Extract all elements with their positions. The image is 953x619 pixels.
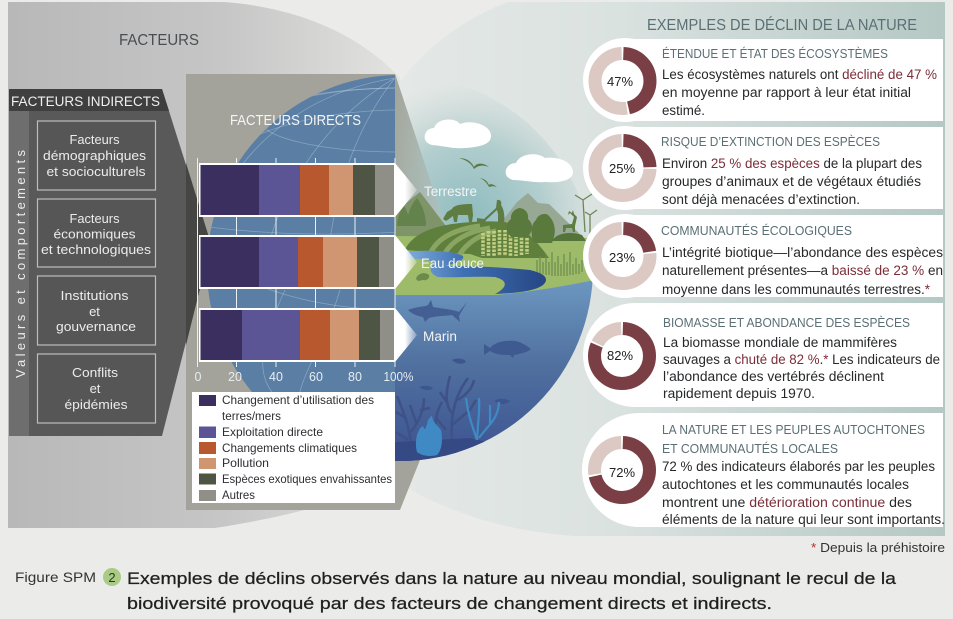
shark [408, 300, 467, 322]
box: economic factors: économiques [54, 226, 136, 242]
box: demographic factors: démographiques [43, 148, 147, 163]
card: indigenous peoples: éléments de la nature qui leur sont importants. [662, 512, 945, 527]
box: economic factors: et technologiques [41, 242, 152, 257]
box: demographic factors [38, 121, 156, 190]
caption text [127, 569, 897, 613]
card: ecosystems: en moyenne par rapport à leur état initial [662, 85, 911, 100]
legend: Espèces exotiques envahissantes [222, 472, 392, 486]
caption text: Exemples de déclins observés dans la nature au niveau mondial, soulignant le recul de la [127, 569, 897, 588]
animals and people [443, 200, 577, 232]
box: conflicts: et [90, 381, 101, 396]
card: indigenous peoples: 72 % des indicateurs élaborés par les peuples [662, 459, 935, 474]
reeds [537, 252, 582, 276]
card: indigenous peoples: LA NATURE ET LES PEUPLES AUTOCHTONES [662, 422, 925, 437]
box: institutions: et [89, 304, 100, 319]
donut: 72%: 72% [609, 465, 635, 480]
corn patch [483, 230, 527, 256]
box: economic factors: Facteurs [70, 211, 120, 226]
deer [563, 210, 577, 232]
beam [395, 74, 444, 260]
card: ecological communities: naturellement présentes—a baissé de 23 % en [662, 263, 943, 278]
hills [395, 192, 586, 240]
legend: terres/mers [222, 409, 281, 423]
dark coral [396, 376, 476, 450]
panel: indirect factors [9, 89, 211, 436]
axis: 40 [269, 370, 283, 384]
box: demographic factors: Facteurs [70, 132, 120, 147]
card: extinction risk: Environ 25 % des espèces de la plupart des [662, 156, 922, 171]
box: demographic factors: et socioculturels [46, 164, 146, 179]
heading: facteurs: FACTEURS [119, 32, 199, 49]
legend: Changement d’utilisation des [222, 393, 374, 407]
axis: 20 [228, 370, 242, 384]
box: institutions: gouvernance [56, 319, 136, 334]
card: indigenous peoples: ET COMMUNAUTÉS LOCALES [662, 441, 838, 456]
card: extinction risk [583, 126, 943, 210]
land [395, 208, 600, 295]
card: biomass: BIOMASSE ET ABONDANCE DES ESPÈCES [663, 315, 910, 330]
farmer [477, 200, 504, 224]
marine life [395, 300, 531, 470]
donut: 23%: 23% [609, 250, 635, 265]
box: conflicts [38, 354, 156, 423]
river [395, 251, 546, 294]
card: extinction risk: RISQUE D’EXTINCTION DES ESPÈCES [661, 134, 880, 149]
donut: 47% [595, 54, 650, 108]
legend: Changements climatiques [222, 441, 357, 455]
arrow: eau douce [395, 235, 417, 289]
box: economic factors [38, 199, 156, 267]
axis: 60 [309, 370, 323, 384]
card: extinction risk: sont déjà menacées d’extinction. [662, 192, 860, 207]
illustration: globe [208, 74, 598, 461]
badge: figure number [103, 568, 121, 586]
trees [507, 208, 555, 243]
clouds [425, 119, 573, 182]
card: ecological communities: moyenne dans les communautés terrestres.* [662, 282, 931, 297]
legend: Pollution [222, 456, 269, 470]
axis: 80 [348, 370, 362, 384]
box: institutions: Institutions [60, 288, 129, 303]
donut: 25% [595, 140, 650, 196]
caption [15, 568, 897, 613]
globe: blue hemisphere with grid [208, 75, 395, 392]
frog [416, 273, 429, 281]
fish [484, 341, 531, 358]
figure label: Figure SPM [15, 570, 96, 585]
heading: exemples de declin de la nature: EXEMPLES DE DÉCLIN DE LA NATURE [647, 17, 917, 34]
arrow: marin [395, 308, 417, 362]
card: ecosystems: estimé. [662, 103, 705, 118]
card: ecosystems [583, 38, 943, 122]
card: ecological communities: COMMUNAUTÉS ÉCOLOGIQUES [661, 223, 852, 238]
axis: 100% [384, 370, 414, 384]
card: biomass [583, 303, 943, 407]
axis [195, 158, 414, 384]
label: marin: Marin [423, 329, 457, 344]
arrow: terrestre [395, 163, 417, 217]
strip: values and behaviours: Valeurs et comportements [13, 150, 28, 378]
bar: marin [199, 308, 395, 362]
strip: values and behaviours [9, 111, 29, 436]
sky glow [408, 96, 586, 236]
heading: facteurs directs: FACTEURS DIRECTS [230, 113, 361, 129]
card: ecosystems: Les écosystèmes naturels ont décliné de 47 % [662, 67, 937, 82]
card: ecosystems: ÉTENDUE ET ÉTAT DES ÉCOSYSTÈMES [662, 46, 888, 61]
card: extinction risk: groupes d’animaux et de végétaux étudiés [662, 174, 921, 189]
panel: nature decline background [395, 2, 945, 536]
card: ecological communities: L’intégrité biotique—l’abondance des espèces [662, 245, 943, 260]
badge: figure number: 2 [108, 570, 116, 585]
label: eau douce: Eau douce [421, 256, 484, 271]
donut: 25%: 25% [609, 161, 635, 176]
card: ecological communities [583, 214, 943, 298]
donut: 72% [594, 442, 650, 498]
ocean [395, 280, 600, 470]
panel: direct factors frame [186, 74, 444, 510]
donut: 82%: 82% [607, 348, 633, 363]
donut: 47%: 47% [607, 74, 633, 89]
footnote: * Depuis la préhistoire [811, 540, 945, 555]
donut: 23% [595, 228, 650, 284]
box: institutions [38, 276, 156, 345]
card: biomass: rapidement depuis 1970. [663, 386, 815, 401]
cow [443, 204, 473, 222]
heading: facteurs indirects: FACTEURS INDIRECTS [11, 94, 160, 109]
curved field [405, 221, 549, 258]
axis: 0 [195, 370, 202, 384]
birds [459, 158, 497, 187]
card: indigenous peoples [582, 413, 945, 527]
card: biomass: La biomasse mondiale de mammifères [663, 335, 897, 350]
heading: facteurs indirects [9, 89, 169, 111]
caption text: biodiversité provoqué par des facteurs de changement directs et indirects. [127, 594, 772, 613]
card: indigenous peoples: autochtones et les communautés locales [662, 477, 909, 492]
chart: direct driver bars [195, 158, 414, 384]
card: biomass: l’abondance des vertébrés déclinent [663, 369, 884, 384]
mound [552, 233, 586, 241]
legend: Exploitation directe [222, 425, 323, 439]
box: conflicts: Conflits [72, 365, 119, 380]
label: terrestre: Terrestre [424, 184, 477, 199]
card: biomass: sauvages a chuté de 82 %.* Les indicateurs de [663, 352, 940, 367]
donut: 82% [594, 328, 650, 384]
box: conflicts: épidémies [64, 397, 128, 412]
bar: eau douce [199, 235, 395, 289]
card: indigenous peoples: montrent une détérioration continue des [662, 495, 912, 510]
bar: terrestre [199, 163, 395, 217]
panel: factors background [8, 2, 400, 528]
wind turbines [575, 194, 597, 240]
legend [192, 392, 395, 503]
bright coral [416, 416, 442, 456]
legend: Autres [222, 488, 255, 502]
